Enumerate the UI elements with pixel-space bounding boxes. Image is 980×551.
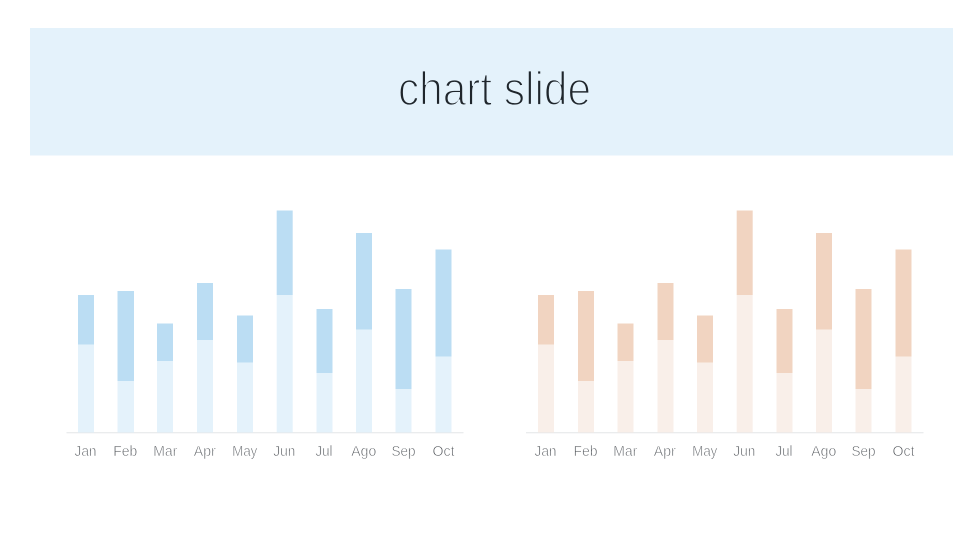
bar: Sep [856,289,872,432]
bar: Jan [78,295,94,432]
month labels: Jan [534,443,556,460]
month labels: Jan [74,443,96,460]
bar: Oct [896,250,912,432]
header banner [30,28,953,156]
month labels: Apr [194,443,216,460]
panel: blue stacked bar chart [66,210,464,460]
bar: Jan [538,295,554,432]
bar: Jul [776,309,792,432]
month labels: Feb [574,443,598,460]
month labels: May [232,443,258,460]
bar: Apr [197,283,213,432]
month labels: Mar [613,443,637,460]
month labels: May [692,443,718,460]
month labels: Oct [892,443,915,460]
bar: May [237,316,253,432]
month labels: Oct [432,443,455,460]
month labels: Sep [852,443,876,460]
bar: Jul [316,309,332,432]
bar: Ago [356,233,372,432]
month labels: Apr [654,443,676,460]
panel: peach stacked bar chart [526,210,924,460]
month labels: Jul [776,443,792,460]
bar: Oct [436,250,452,432]
month labels: Jun [273,443,295,460]
month labels: Mar [153,443,177,460]
title: chart slide [398,62,591,115]
month labels [74,443,455,460]
bar: May [697,316,713,432]
month labels: Jun [733,443,755,460]
month labels: Jul [316,443,332,460]
bar: Jun [277,210,293,432]
month labels: Feb [113,443,137,460]
bar: Mar [157,324,173,432]
month labels [534,443,915,460]
bar: Feb [118,291,134,432]
bar: Ago [816,233,832,432]
bar: Mar [618,324,634,432]
month labels: Ago [811,443,836,460]
bar: Feb [578,291,594,432]
month labels: Sep [392,443,416,460]
month labels: Ago [351,443,376,460]
bar: Apr [658,283,674,432]
bar: Jun [737,210,753,432]
bar: Sep [396,289,412,432]
